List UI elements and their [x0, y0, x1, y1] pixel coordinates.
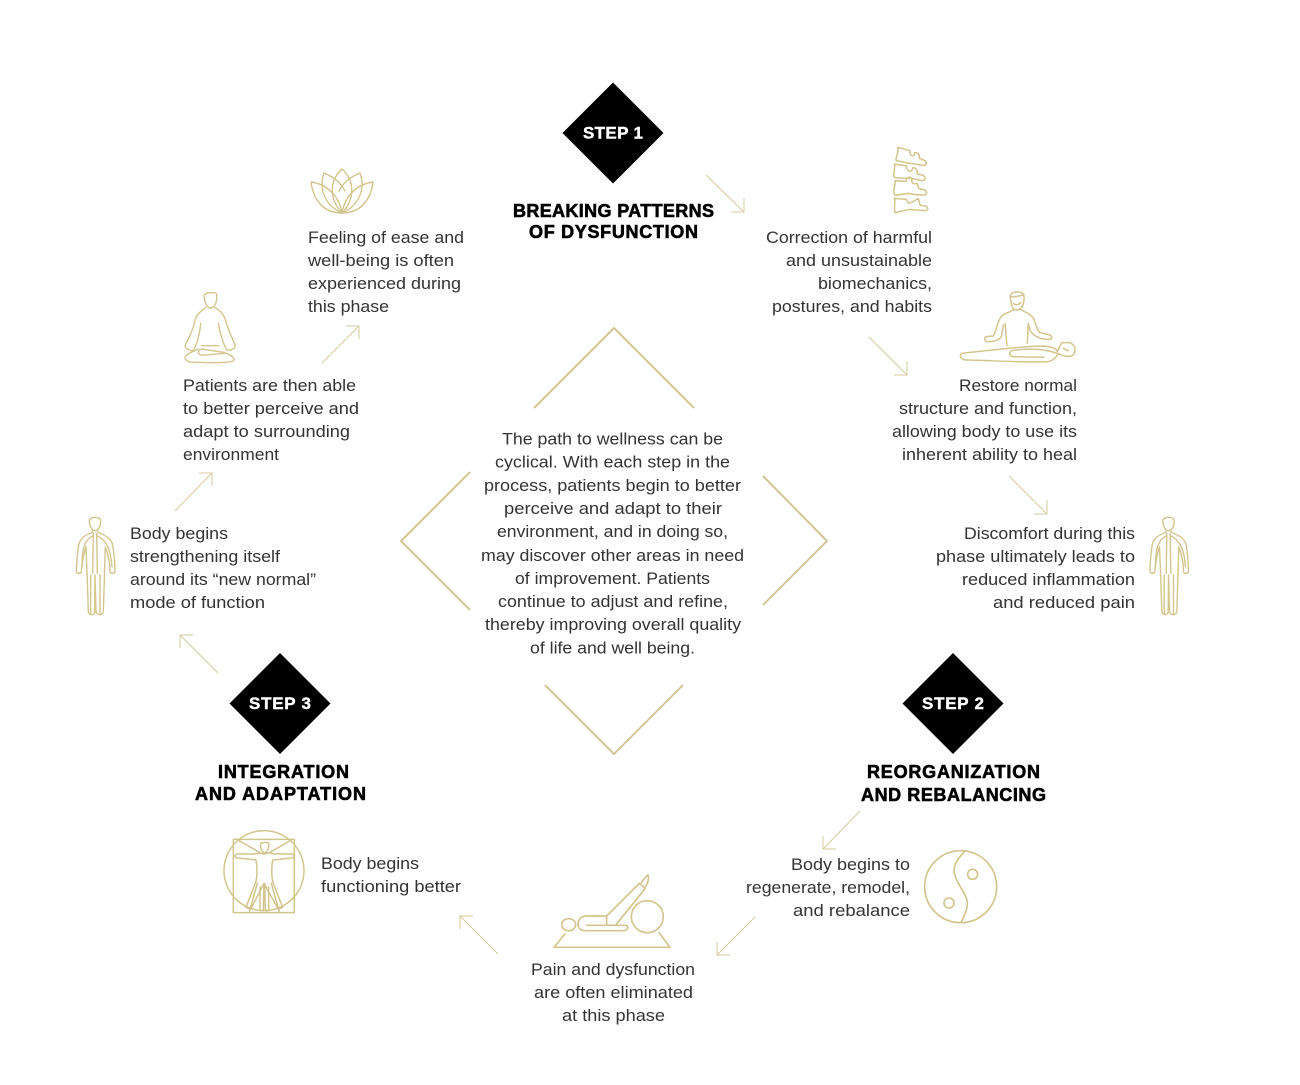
text: functioning better: functioning better [321, 877, 461, 896]
centre text: thereby improving overall quality [485, 615, 742, 634]
icon: pilates with ball [554, 875, 670, 947]
step 1 badge [562, 82, 664, 184]
text: body strengthening: strengthening itself [130, 547, 280, 566]
text: body strengthening [130, 524, 316, 612]
step 2 heading: REORGANIZATION [867, 762, 1040, 782]
text: ease and well-being: well-being is often [307, 251, 454, 270]
step 3 heading: AND ADAPTATION [195, 784, 366, 804]
step 2 heading: AND REBALANCING [861, 785, 1046, 805]
text: patients perceive: to better perceive and [183, 399, 359, 418]
centre text: of improvement. Patients [515, 569, 710, 588]
icon: lotus [311, 169, 373, 213]
text: ease and well-being: experienced during [308, 274, 461, 293]
step 2 heading [861, 762, 1046, 805]
arrow: correction to restore [869, 337, 907, 375]
text: regenerate: regenerate, remodel, [746, 878, 910, 897]
text: ease and well-being: Feeling of ease and [308, 228, 464, 247]
text: regenerate: Body begins to [791, 855, 910, 874]
text: restore structure: Restore normal [959, 376, 1077, 395]
step 2 badge [902, 653, 1004, 754]
step 1 heading: OF DYSFUNCTION [529, 222, 698, 242]
text: regenerate [746, 855, 910, 920]
text: restore structure: allowing body to use its [892, 422, 1077, 441]
arrow: regenerate to pain [717, 917, 755, 955]
icon: yin yang [925, 851, 997, 923]
text: ease and well-being: this phase [308, 297, 389, 316]
arrow: pain to functioning [460, 916, 498, 954]
text: discomfort: phase ultimately leads to [936, 547, 1135, 566]
text: restore structure: inherent ability to heal [902, 445, 1077, 464]
step 3 heading: INTEGRATION [218, 762, 349, 782]
text: patients perceive: adapt to surrounding [183, 422, 350, 441]
arrow: strengthening to perceive [175, 473, 212, 511]
centre text: of life and well being. [530, 638, 695, 658]
icon: seated meditation [185, 293, 235, 363]
centre text: process, patients begin to better [484, 476, 741, 495]
text: body strengthening: Body begins [130, 524, 228, 543]
text: discomfort: reduced inflammation [962, 570, 1135, 589]
text: functioning better [321, 854, 461, 896]
icon: vitruvian figure [224, 831, 304, 913]
step 3 badge: STEP 3 [249, 694, 311, 713]
icon: healer with patient [960, 292, 1075, 362]
centre text: may discover other areas in need [481, 546, 744, 565]
text: discomfort: and reduced pain [993, 593, 1135, 612]
centre text: cyclical. With each step in the [495, 452, 730, 472]
text: restore structure [892, 376, 1077, 464]
text: correction of biomechanics: Correction of harmful [766, 228, 932, 247]
text: ease and well-being [307, 228, 464, 316]
text: functioning better: Body begins [321, 854, 419, 873]
text: discomfort [936, 524, 1135, 612]
text: body strengthening: mode of function [130, 593, 265, 612]
arrow: step 2 to regenerate [823, 811, 860, 849]
centre text: environment, and in doing so, [497, 522, 728, 541]
text: patients perceive: Patients are then able [183, 376, 356, 395]
icon: standing body right [1150, 517, 1188, 615]
centre text: continue to adjust and refine, [498, 592, 728, 611]
text: patients perceive: environment [183, 445, 279, 464]
text: patients perceive [183, 376, 359, 464]
icon: spine [894, 147, 928, 213]
text: pain eliminated: are often eliminated [534, 983, 693, 1002]
step 2 badge: STEP 2 [922, 694, 984, 713]
step 3 badge [230, 653, 330, 754]
text: discomfort: Discomfort during this [964, 524, 1135, 543]
centre text [481, 430, 744, 658]
text: restore structure: structure and function, [899, 399, 1077, 418]
arrow: step 3 to strengthening [180, 635, 218, 673]
arrow: restore to discomfort [1009, 476, 1047, 514]
text: pain eliminated: Pain and dysfunction [531, 960, 695, 979]
step 1 heading: BREAKING PATTERNS [513, 201, 714, 221]
text: body strengthening: around its “new normal” [130, 570, 316, 589]
icon: standing body left [76, 517, 115, 615]
arrow: step 1 to correction [706, 175, 744, 212]
step 3 heading [195, 762, 366, 804]
step 1 badge: STEP 1 [583, 124, 643, 142]
central diamond frame [401, 328, 827, 754]
text: correction of biomechanics [766, 228, 932, 316]
step 1 heading [513, 201, 714, 242]
text: regenerate: and rebalance [793, 901, 910, 920]
text: pain eliminated: at this phase [562, 1006, 665, 1025]
text: correction of biomechanics: postures, and habits [772, 297, 932, 316]
centre text: perceive and adapt to their [504, 499, 722, 518]
text: pain eliminated [531, 960, 695, 1025]
arrow: perceive to well-being [322, 326, 359, 363]
text: correction of biomechanics: and unsustainable [786, 251, 932, 270]
text: correction of biomechanics: biomechanics, [818, 274, 932, 293]
centre text: The path to wellness can be [502, 430, 723, 448]
